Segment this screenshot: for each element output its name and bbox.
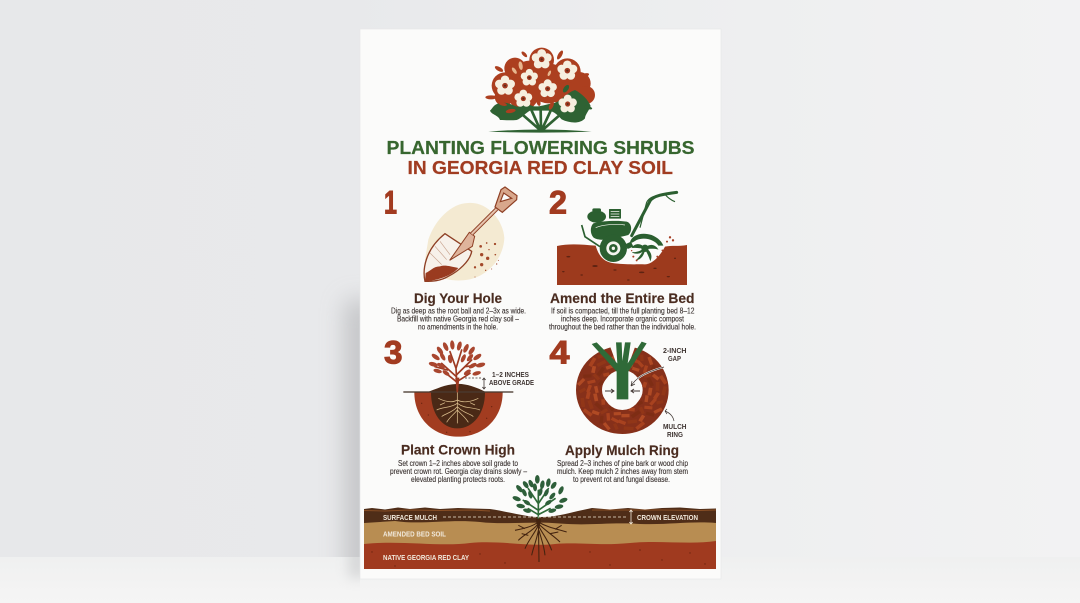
step 4 description: to prevent rot and fungal disease. bbox=[573, 475, 670, 484]
heading: Plant Crown High: Plant Crown High bbox=[401, 442, 515, 458]
branches bbox=[523, 489, 555, 518]
layer: native clay bbox=[364, 540, 716, 569]
hole and top gap bbox=[603, 370, 642, 410]
step 1 description: no amendments in the hole. bbox=[418, 322, 498, 331]
icon: tiller in soil bed bbox=[557, 192, 687, 285]
heading: Amend the Entire Bed: Amend the Entire Bed bbox=[550, 290, 694, 306]
step 1 description: Backfill with native Georgia red clay soil – bbox=[397, 314, 519, 323]
roots bbox=[515, 517, 567, 562]
stem and branches bbox=[592, 342, 647, 399]
number 4: 4 bbox=[550, 334, 570, 370]
step 3 description: Set crown 1–2 inches above soil grade to bbox=[398, 459, 518, 468]
step 1 description bbox=[391, 306, 526, 331]
heading: Apply Mulch Ring: Apply Mulch Ring bbox=[565, 442, 679, 458]
step 3 description bbox=[390, 459, 527, 484]
step 2 description: inches deep. Incorporate organic compost bbox=[561, 314, 685, 324]
soil bed bbox=[557, 244, 687, 285]
ground bbox=[488, 129, 592, 133]
step 4 description: Spread 2–3 inches of pine bark or wood chip bbox=[557, 459, 688, 468]
step 1 description: Dig as deep as the root ball and 2–3x as wide. bbox=[391, 306, 526, 316]
title: IN GEORGIA RED CLAY SOIL bbox=[408, 158, 673, 178]
tiller fender and tines bbox=[630, 234, 663, 246]
number 1: 1 bbox=[384, 184, 397, 220]
shrub stems bbox=[523, 110, 559, 129]
plant in soil bbox=[512, 475, 568, 562]
label: amended bed soil: AMENDED BED SOIL bbox=[383, 530, 446, 538]
tree branches bbox=[435, 350, 478, 392]
layer: surface mulch bbox=[364, 508, 716, 524]
shrub green foliage bbox=[490, 90, 591, 122]
step 3 description: prevent crown rot. Georgia clay drains slowly – bbox=[390, 467, 527, 476]
soil cross-section bbox=[364, 475, 716, 569]
step 1 panel bbox=[384, 184, 526, 331]
tree leaves bbox=[428, 340, 486, 377]
label: surface mulch: SURFACE MULCH bbox=[383, 513, 437, 522]
soil speckles bbox=[371, 549, 706, 567]
poster panel bbox=[360, 29, 721, 579]
callout: 2-inch gap bbox=[605, 346, 686, 393]
title: PLANTING FLOWERING SHRUBS bbox=[386, 138, 694, 158]
icon: flowering shrub bbox=[485, 48, 595, 133]
callout: mulch ring label bbox=[663, 409, 686, 439]
step 4 description bbox=[557, 459, 688, 484]
step 2 description: throughout the bed rather than the individual hole. bbox=[549, 322, 696, 331]
step 4 description: mulch. Keep mulch 2 inches away from stem bbox=[557, 467, 688, 476]
callout: crown height bbox=[465, 370, 534, 389]
heading: Dig Your Hole: Dig Your Hole bbox=[414, 290, 502, 306]
step 4 panel bbox=[550, 334, 688, 484]
soil particles bbox=[631, 236, 674, 261]
callout: crown height: 1–2 INCHES bbox=[492, 370, 529, 379]
icon: mulch ring bbox=[577, 342, 668, 433]
step 3 panel bbox=[384, 334, 534, 484]
tiller handle bbox=[632, 192, 677, 236]
title bbox=[386, 138, 694, 178]
poster shadow on floor bbox=[346, 557, 360, 580]
callout: 2-inch gap: 2-INCH bbox=[663, 346, 686, 355]
callout: mulch ring label: MULCH bbox=[663, 422, 686, 431]
label: crown elevation: CROWN ELEVATION bbox=[637, 513, 698, 522]
step 2 description bbox=[549, 306, 696, 331]
crown line bbox=[443, 516, 628, 518]
leaves bbox=[512, 475, 568, 514]
shrub flowers bbox=[495, 49, 577, 112]
step 2 description: If soil is compacted, till the full planting bed 8–12 bbox=[551, 306, 695, 316]
number 3: 3 bbox=[384, 334, 402, 370]
floor bbox=[0, 557, 1080, 603]
label: native georgia red clay: NATIVE GEORGIA RED CLAY bbox=[383, 553, 469, 562]
arrow: crown elevation bbox=[629, 510, 633, 524]
poster shadow on wall bbox=[336, 292, 360, 557]
roots bbox=[437, 392, 480, 423]
shrub red crown bbox=[492, 48, 595, 110]
shrub accent leaves bbox=[485, 50, 590, 114]
icon: shovel bbox=[424, 187, 517, 281]
tiller wheel bbox=[600, 235, 627, 262]
step 3 description: elevated planting protects roots. bbox=[411, 475, 505, 484]
layer: amended soil bbox=[364, 521, 716, 545]
number 2: 2 bbox=[549, 184, 567, 220]
callout: 2-inch gap: GAP bbox=[668, 354, 681, 363]
step 2 panel bbox=[549, 184, 696, 331]
icon: planted shrub in hole bbox=[403, 340, 513, 437]
tiller engine bbox=[587, 211, 606, 223]
callout: crown height: ABOVE GRADE bbox=[489, 378, 534, 387]
callout: mulch ring label: RING bbox=[667, 430, 683, 439]
